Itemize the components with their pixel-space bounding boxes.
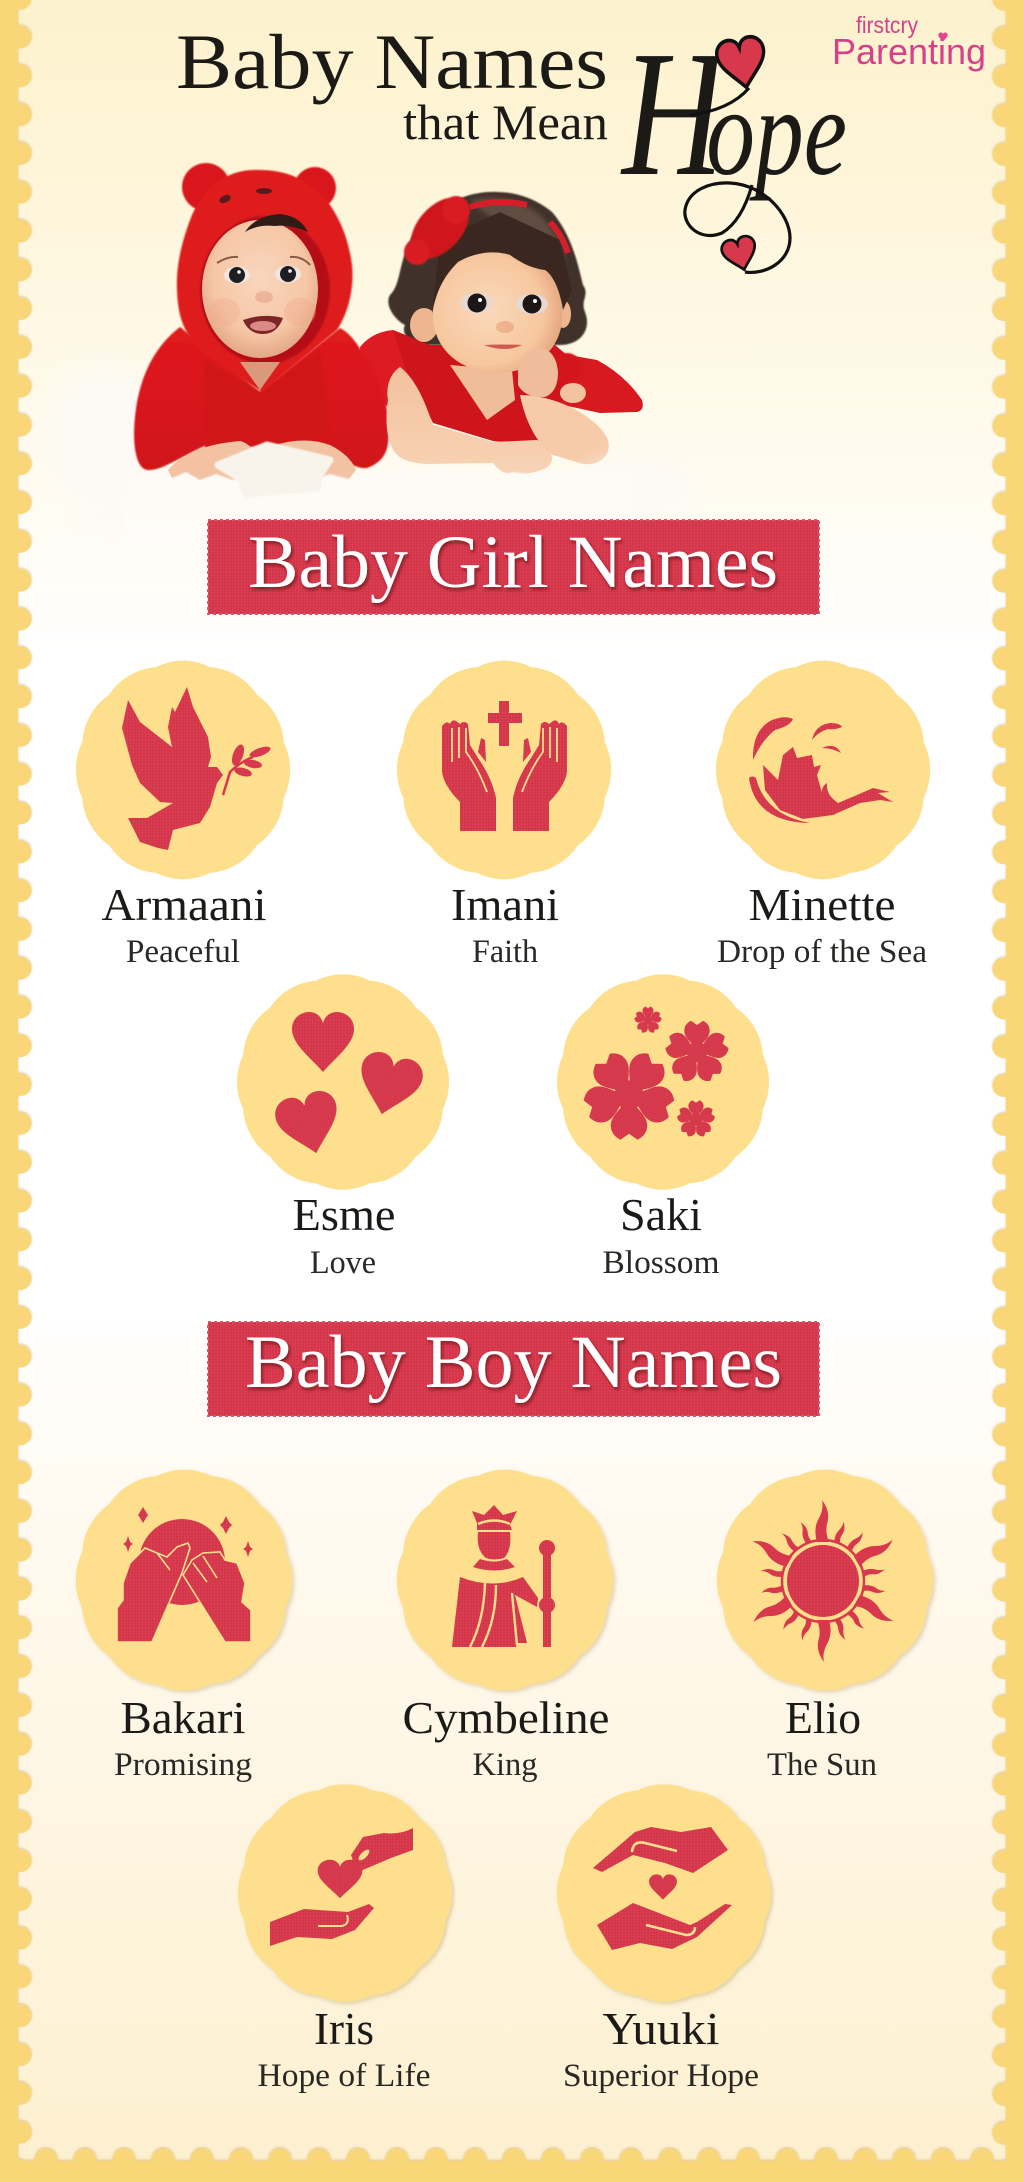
panel: Yuuki xyxy=(557,1784,771,2094)
meaning: Hope of Life xyxy=(258,2058,430,2094)
heading line one: Baby Names xyxy=(176,18,608,105)
hood xyxy=(177,170,352,392)
icon: hands passing a heart xyxy=(270,1828,413,1946)
swash with hearts xyxy=(685,35,790,274)
baby girl skirt behind xyxy=(360,330,430,420)
jacket chest xyxy=(205,350,332,448)
panel: Iris xyxy=(238,1784,452,2094)
hair back xyxy=(388,192,587,345)
panel: Elio xyxy=(717,1470,933,1783)
badge xyxy=(557,974,769,1190)
photo: two babies on white fluff xyxy=(45,163,700,560)
star toy xyxy=(218,445,330,494)
panel: Saki xyxy=(557,974,769,1281)
icon: three hearts xyxy=(272,1012,426,1161)
icon: king with sceptre xyxy=(452,1505,555,1647)
fringe xyxy=(432,212,572,315)
title xyxy=(176,13,847,274)
icon: pinky promise xyxy=(117,1507,253,1642)
banner ribbon xyxy=(208,1322,819,1416)
badge xyxy=(76,1470,292,1690)
name: Bakari xyxy=(120,1692,246,1743)
panel: Bakari xyxy=(76,1470,292,1783)
arm right xyxy=(520,395,609,464)
icon: dove with olive branch xyxy=(122,687,272,850)
logo large word: Parenting xyxy=(832,31,986,72)
name: Yuuki xyxy=(602,2003,720,2054)
arm left xyxy=(386,367,552,474)
name: Saki xyxy=(620,1189,702,1240)
hood face details xyxy=(218,188,272,205)
hands xyxy=(168,440,356,484)
badge xyxy=(557,1784,771,2002)
meaning: Drop of the Sea xyxy=(717,934,927,970)
meaning: King xyxy=(472,1747,538,1783)
dress skirt xyxy=(540,350,643,413)
logo xyxy=(832,12,986,72)
name: Elio xyxy=(785,1692,861,1743)
panel: Armaani xyxy=(76,661,290,970)
meaning: Faith xyxy=(472,934,538,970)
sleeve ruffle xyxy=(552,353,582,383)
hair highlight xyxy=(470,198,565,262)
heading banner: girl names xyxy=(208,520,819,614)
baby boy xyxy=(134,163,388,484)
badge xyxy=(238,1784,452,2002)
front fluff xyxy=(125,464,640,560)
neck xyxy=(240,362,280,390)
fist xyxy=(518,348,558,397)
badge xyxy=(397,1470,613,1690)
name: Cymbeline xyxy=(402,1692,610,1743)
eyes xyxy=(224,266,301,284)
badge xyxy=(397,661,611,879)
name: Minette xyxy=(748,879,896,930)
meaning: Promising xyxy=(114,1747,252,1783)
jacket xyxy=(134,327,388,470)
name: Armaani xyxy=(102,879,266,930)
banner heading: Baby Girl Names xyxy=(248,521,778,604)
logo heart xyxy=(938,32,948,42)
badge xyxy=(237,974,449,1190)
badge xyxy=(76,661,290,879)
fluff left glow xyxy=(45,365,165,515)
banner ribbon xyxy=(208,520,819,614)
dress front xyxy=(393,330,575,448)
name: Imani xyxy=(451,879,559,930)
panel: Minette xyxy=(716,661,930,970)
icon: sea wave and drops xyxy=(749,717,893,823)
panel: Imani xyxy=(397,661,611,970)
icon: cherry blossoms xyxy=(581,1006,731,1140)
panel: Cymbeline xyxy=(397,1470,613,1783)
eyes xyxy=(461,293,548,314)
cheeks xyxy=(208,298,316,326)
name: Esme xyxy=(292,1189,396,1240)
meaning: Superior Hope xyxy=(563,2058,759,2094)
icon: sun xyxy=(749,1500,897,1662)
meaning: Love xyxy=(310,1245,376,1281)
meaning: Peaceful xyxy=(126,934,240,970)
nose and mouth xyxy=(484,321,522,349)
name: Iris xyxy=(314,2003,374,2054)
ears xyxy=(410,300,571,342)
headband xyxy=(470,202,568,253)
hood inner xyxy=(200,216,330,364)
meaning: Blossom xyxy=(602,1245,720,1281)
script word Hope: Hope xyxy=(620,13,847,213)
face xyxy=(433,248,562,373)
meaning: The Sun xyxy=(767,1747,877,1783)
badge xyxy=(716,661,930,879)
brows xyxy=(217,257,310,265)
banner heading: Baby Boy Names xyxy=(245,1321,782,1404)
chest xyxy=(450,365,515,420)
icon: praying hands and cross xyxy=(442,701,567,831)
baby girl xyxy=(386,187,643,474)
hair flower xyxy=(400,187,480,269)
panel: Esme xyxy=(237,974,449,1281)
nose and mouth xyxy=(243,291,283,334)
heading banner: boy names xyxy=(208,1321,819,1416)
hair xyxy=(245,214,308,232)
heading line two: that Mean xyxy=(403,94,608,150)
logo small word: firstcry xyxy=(856,12,918,38)
badge xyxy=(717,1470,933,1690)
icon: hands protecting a heart xyxy=(593,1827,732,1950)
right shoulder xyxy=(560,383,586,403)
hood ears xyxy=(182,163,336,211)
fluff side glows xyxy=(60,460,700,544)
face xyxy=(202,220,318,358)
